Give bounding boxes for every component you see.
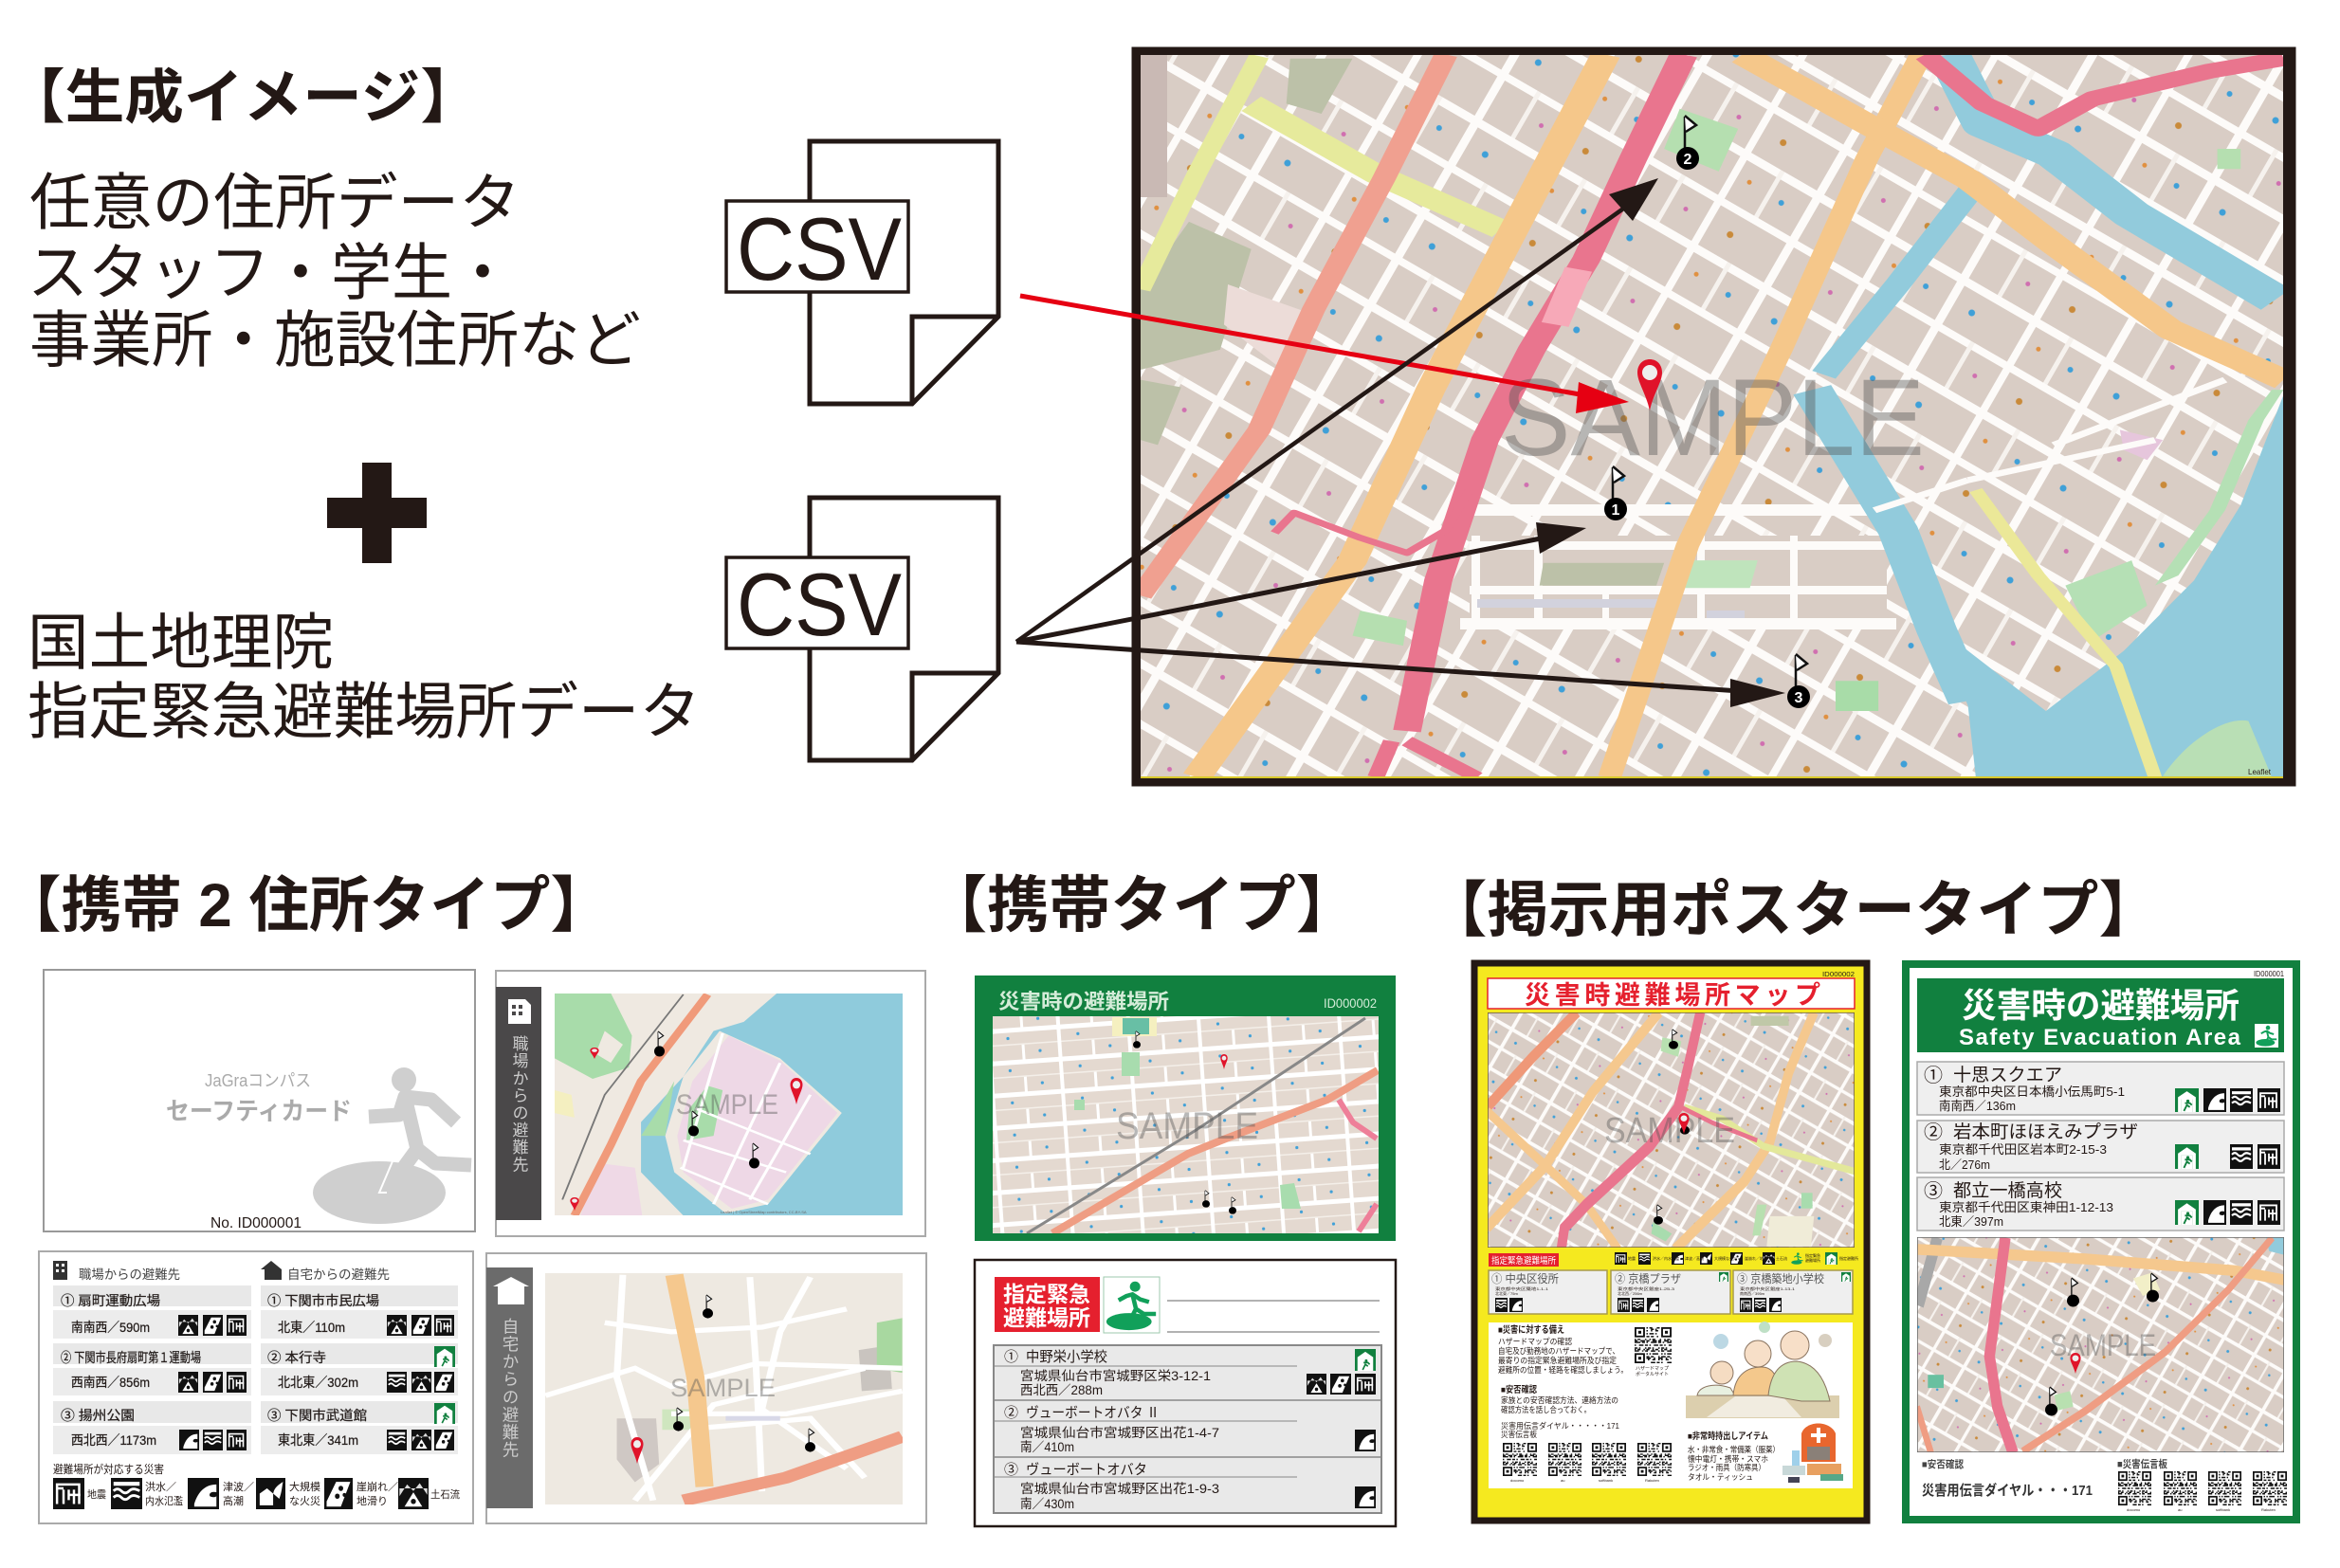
workplace shelters: 西北西／1173m [71,1432,156,1448]
disaster type legend: 洪水／ [145,1480,176,1493]
disaster legend: 津波／高潮 [1685,1255,1704,1261]
shelter table: 中野栄小学校 [1026,1349,1107,1365]
disaster legend: 指定緊急 [1805,1252,1820,1258]
map watermark: SAMPLE [1116,1105,1258,1147]
workplace shelters [53,1285,251,1454]
poster header [1917,978,2284,1052]
map marker: shelter 1: 1 [1612,502,1620,519]
home shelters: ② 本行寺 [267,1350,326,1365]
red label: 避難場所 [1003,1305,1090,1330]
workplace shelters: ③ 揚州公園 [61,1408,135,1423]
disaster message board footer [2117,1457,2287,1512]
icon: CSV document 1 [726,141,998,404]
shelter row 3 [1917,1177,2284,1231]
qr row: au [1561,1478,1564,1483]
red label: 指定緊急 [1003,1282,1090,1306]
safety confirmation text: 確認方法を話し合っておく。 [1501,1405,1591,1414]
disaster type legend: 内水氾濫 [145,1494,183,1507]
shelter row 3: 都立一橋高校 [1953,1180,2062,1201]
map watermark: SAMPLE [1604,1111,1735,1151]
shelter row 1: 十思スクエア [1953,1065,2062,1085]
shelter row 2: 東京都千代田区岩本町2-15-3 [1939,1142,2107,1157]
panel: portable card back [975,1260,1396,1526]
icon: green runner [1104,1277,1160,1333]
shelter row 2: ② [1924,1121,1943,1143]
home shelters: 北北東／302m [278,1375,358,1390]
poster id: ID000001 [2254,970,2285,978]
text block: GSI designated emergency shelter data: 指定緊急避難場所データ [27,677,701,746]
emergency items text: ■非常時持出しアイテム [1688,1431,1768,1442]
panel: main city map: Leaflet [2248,768,2272,776]
shelter row 1: 南南西／136m [1939,1099,2016,1113]
disaster legend: 地震 [1628,1255,1636,1261]
poster header: 災害時の避難場所 [1962,986,2239,1025]
disaster legend: 指定避難所 [1839,1255,1858,1261]
card id: ID000002 [1324,995,1377,1011]
icon: CSV document 1: CSV [737,199,902,299]
map: Leaflet | © OpenStreetMap contributors, CC-BY-SA [721,1210,807,1214]
panel: main city map [1135,50,2293,783]
shelter row 2 [1917,1121,2284,1173]
heading: generation image: 【生成イメージ】 [6,65,480,131]
disaster legend: 土石流 [1776,1255,1787,1261]
shelter row 2: 北／276m [1939,1158,1990,1172]
disaster type legend [53,1462,460,1509]
white information block [1489,1322,1853,1488]
qr: hazard map portal: ポータルサイト [1636,1371,1669,1377]
text block: arbitrary address data: 事業所・施設住所など [29,305,641,374]
preparedness text: 自宅及び勤務地のハザードマップで、 [1498,1346,1619,1356]
emergency items text: 水・非常食・常備薬（服薬） [1688,1445,1780,1454]
disaster legend: 洪水／内水氾濫 [1653,1255,1679,1261]
workplace shelters: ① 扇町運動広場 [61,1293,160,1308]
preparedness text [1498,1323,1628,1375]
card number: No. ID000001 [210,1215,302,1231]
map marker: red address pin [1637,359,1662,410]
qr row: docomo [1510,1478,1525,1483]
shelter box 3 [1733,1270,1853,1314]
disaster message board footer: Rakuten [2261,1507,2276,1512]
disaster legend: 避難場所 [1805,1257,1820,1263]
shelter row 1: ① [1924,1065,1943,1086]
safety confirmation footer [1922,1458,2093,1499]
shelter markers [2045,1273,2159,1415]
panel: green poster [1906,964,2296,1520]
shelter markers [1133,1031,1236,1214]
shelter markers [631,1295,815,1464]
emergency items text [1688,1431,1780,1482]
disaster type legend: 地震 [87,1488,106,1501]
map watermark: SAMPLE [2050,1328,2156,1362]
disaster message board footer: ■災害伝言板 [2117,1457,2167,1470]
preparedness text: 最寄りの指定緊急避難場所及び指定 [1498,1356,1617,1365]
map watermark: SAMPLE [670,1374,776,1402]
disaster legend: 崖崩れ／地滑り [1745,1255,1771,1261]
card title: 災害時の避難場所 [998,990,1169,1013]
emergency items text: タオル・ティッシュ [1688,1472,1753,1482]
heading: portable type: 【携帯タイプ】 [925,870,1358,939]
preparedness text: 避難所の位置・経路を確認しましょう。 [1498,1365,1628,1375]
shelter box 2: 東京都中央区銀座1-25-3 [1618,1285,1675,1291]
panel: home evacuation map card [486,1253,926,1523]
shelter box 2: 北北西／256m [1618,1290,1643,1296]
shelter box 2 [1611,1270,1730,1314]
panel: main city map: SAMPLE [1501,357,1925,479]
map marker: shelter 2: 2 [1684,152,1692,168]
side band [496,987,541,1220]
home shelters [261,1285,458,1454]
icon: CSV document 2 [726,498,998,760]
icon: house [493,1277,529,1304]
shelter table: 南／430m [1020,1497,1074,1511]
home list heading: 自宅からの避難先 [287,1267,390,1282]
map marker: shelter 2 [1676,116,1699,170]
shelter table: 宮城県仙台市宮城野区栄3-12-1 [1020,1369,1211,1383]
heading: posted poster type: 【掲示用ポスタータイプ】 [1426,876,2160,944]
panel: green portable card front [975,975,1396,1241]
shelter box 3: 東京都中央区銀座1-13-1 [1740,1285,1796,1291]
arrow: black, shelter CSV to shelter 3 [1016,642,1785,707]
qr row: softbank [1599,1478,1613,1483]
shelter box 2: ② 京橋プラザ [1615,1272,1681,1285]
shelter box 1: 東京都中央区築地1-1-1 [1495,1285,1549,1291]
workplace list heading: 職場からの避難先 [79,1267,180,1282]
poster title: 災害時避難場所マップ [1525,981,1820,1010]
icon: CSV document 2: CSV [737,555,902,654]
shelter table: 宮城県仙台市宮城野区出花1-9-3 [1020,1482,1219,1496]
emergency items text: ラジオ・雨具（防寒具） [1688,1463,1765,1472]
home shelters: ① 下関市市民広場 [267,1293,379,1308]
shelter table: 南／410m [1020,1440,1074,1454]
safety confirmation text: ■安否確認 [1501,1384,1537,1395]
safety confirmation footer: ■安否確認 [1922,1458,1964,1470]
text block: GSI designated emergency shelter data: 国土地理院 [27,608,334,677]
disaster type legend: 崖崩れ／ [356,1480,398,1493]
disaster type legend: 地滑り [356,1495,388,1507]
illustration: family checking a hazard map [1686,1322,1839,1418]
shelter table: ② [1004,1405,1018,1421]
disaster legend: 大規模な火災 [1714,1255,1737,1261]
safety confirmation footer: 災害用伝言ダイヤル・・・171 [1922,1482,2093,1499]
disaster message board footer: docomo [2127,1507,2141,1512]
qr row: Rakuten [1645,1478,1659,1483]
panel: shelter list card [39,1251,473,1523]
disaster message board footer: softbank [2216,1507,2230,1512]
shelter table: 宮城県仙台市宮城野区出花1-4-7 [1020,1426,1219,1440]
map [1915,1237,2287,1453]
shelter table: ③ [1004,1462,1018,1478]
emergency items text: 懐中電灯・携帯・スマホ [1688,1454,1768,1464]
home shelters: 北東／110m [278,1320,345,1335]
shelter row 2: 岩本町ほほえみプラザ [1953,1121,2138,1142]
shelter box 3: ③ 京橋築地小学校 [1737,1271,1824,1285]
shelter table: ヴューボートオバタ [1026,1462,1147,1478]
vertical label: 自宅からの避難先 [501,1318,520,1459]
map marker: shelter 1 [1604,466,1627,520]
qr: hazard map portal [1635,1327,1672,1377]
safety confirmation text [1501,1384,1619,1439]
icon: grey running figure [313,1067,471,1224]
panel: safety card cover [44,970,475,1231]
text block: arbitrary address data [27,168,641,374]
disaster type legend: な火災 [289,1495,320,1507]
illustration: emergency backpack [1782,1424,1843,1483]
home shelters: 東北東／341m [278,1432,358,1448]
shelter row 1 [1917,1062,2284,1115]
icon: plus sign [327,463,427,563]
shelter table: ヴューボートオバタ Ⅱ [1026,1405,1160,1421]
shelter box 1 [1489,1270,1607,1314]
disaster type legend: 津波／ [223,1481,254,1493]
arrow: black, shelter CSV to shelter 2 [1016,178,1658,642]
card brand text: JaGraコンパス [205,1071,311,1090]
shelter box 1: ① 中央区役所 [1491,1271,1559,1285]
poster id: ID000002 [1822,970,1855,978]
preparedness text: ■災害に対する備え [1498,1323,1564,1336]
shelter table: ① [1004,1349,1018,1365]
arrow: black, shelter CSV to shelter 1 [1016,522,1586,642]
shelter box 3: 南南西／395m [1740,1290,1765,1296]
map [545,1273,903,1504]
disaster message board footer: au [2178,1507,2182,1512]
shelter row 3: 北東／397m [1939,1214,2003,1229]
qr: hazard map portal: ハザードマップ [1636,1366,1669,1372]
map watermark: SAMPLE [676,1089,778,1121]
address write lines [1167,1301,1380,1332]
map marker: shelter 3: 3 [1795,690,1803,706]
disaster type legend: 避難場所が対応する災害 [53,1462,164,1476]
heading: portable 2-address type: 【携帯 2 住所タイプ】 [1,871,611,939]
side band [486,1267,533,1508]
safety confirmation text: 災害用伝言ダイヤル・・・・・171 [1501,1421,1619,1431]
disaster type legend: 大規模 [289,1480,320,1493]
red label [995,1277,1100,1332]
icon: office building [508,999,531,1024]
workplace shelters: ② 下関市長府扇町第１運動場 [61,1350,201,1365]
safety confirmation text: 家族との安否確認方法、連絡方法の [1501,1395,1618,1405]
disaster legend [1615,1252,1858,1265]
workplace list heading [53,1261,180,1282]
shelter table: 西北西／288m [1020,1383,1103,1397]
vertical label: 職場からの避難先 [510,1035,528,1174]
safety confirmation text: 災害伝言板 [1501,1430,1537,1439]
text block: arbitrary address data: 任意の住所データ [29,168,521,237]
card title: セーフティカード [166,1097,352,1125]
workplace shelters: 西南西／856m [71,1375,150,1390]
shelter row 3: ③ [1924,1180,1943,1202]
panel: yellow poster [1474,963,1867,1521]
preparedness text: ハザードマップの確認 [1498,1337,1572,1346]
text block: GSI designated emergency shelter data [27,608,701,746]
shelter box 1: 北北東／75m [1495,1290,1518,1296]
designated shelter label: 指定緊急避難場所 [1491,1255,1556,1267]
disaster type legend: 高潮 [223,1494,244,1507]
map [993,1016,1379,1233]
arrow: red, address CSV to pin [1020,296,1629,413]
shelter markers [570,1031,802,1211]
shelter row 1: 東京都中央区日本橋小伝馬町5-1 [1939,1085,2125,1099]
home list heading [261,1261,390,1282]
panel: workplace evacuation map card [496,971,925,1236]
map [1487,1012,1856,1249]
text block: arbitrary address data: スタッフ・学生・ [27,238,513,307]
map marker: shelter 3 [1787,654,1810,708]
qr row [1503,1443,1672,1483]
shelter row 3: 東京都千代田区東神田1-12-13 [1939,1200,2113,1214]
disaster type legend: 土石流 [430,1488,460,1501]
workplace shelters: 南南西／590m [71,1320,150,1335]
home shelters: ③ 下関市武道館 [267,1408,367,1423]
shelter table [994,1345,1381,1513]
map [555,994,903,1215]
poster header: Safety Evacuation Area [1959,1025,2241,1050]
shelter markers [1654,1030,1690,1225]
